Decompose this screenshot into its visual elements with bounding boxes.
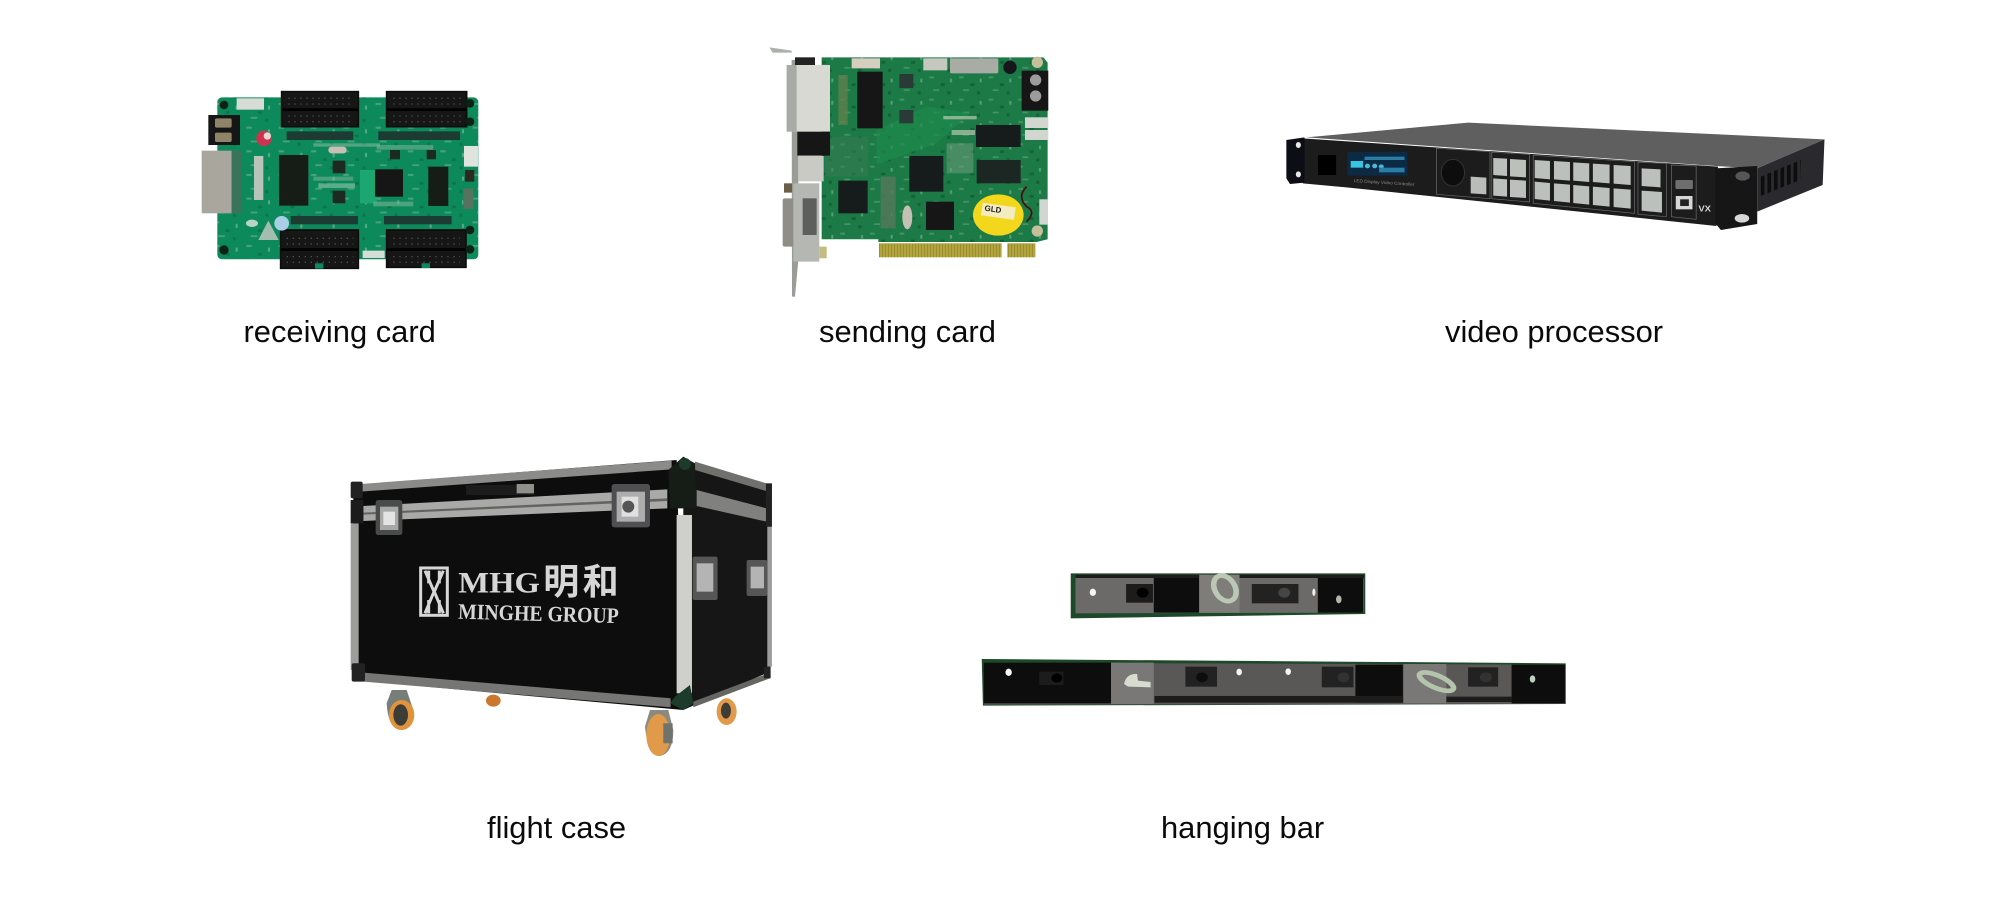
logo: MHG Minghe Group: MHG <box>458 568 540 600</box>
panel: hanging bar <box>982 573 1566 845</box>
logo: MHG Minghe Group <box>421 553 619 628</box>
label: video processor: video processor <box>1445 314 1663 349</box>
panel: receiving card <box>202 92 478 349</box>
image: video processor rack unit: LED Display Video Controller <box>1354 178 1415 187</box>
panel: sending card <box>769 47 1048 349</box>
image: sending card circuit board <box>769 47 1048 297</box>
image: short hanging bar <box>1071 573 1365 618</box>
panel: flight case <box>351 457 772 845</box>
image: sending card circuit board: GLD <box>984 204 1002 215</box>
panel: video processor <box>1286 123 1824 349</box>
label: sending card: sending card <box>819 314 996 349</box>
label: receiving card: receiving card <box>244 314 436 349</box>
label: hanging bar: hanging bar <box>1161 810 1324 845</box>
image: video processor rack unit <box>1286 123 1824 230</box>
image: video processor rack unit: VX <box>1698 204 1711 213</box>
logo: MHG Minghe Group: MINGHE GROUP <box>458 599 619 628</box>
label: flight case: flight case <box>487 810 626 845</box>
logo: MHG Minghe Group: 明和 <box>543 553 619 605</box>
image: long hanging bar <box>982 659 1566 706</box>
image: flight case <box>351 457 772 756</box>
image: receiving card circuit board <box>202 92 478 269</box>
